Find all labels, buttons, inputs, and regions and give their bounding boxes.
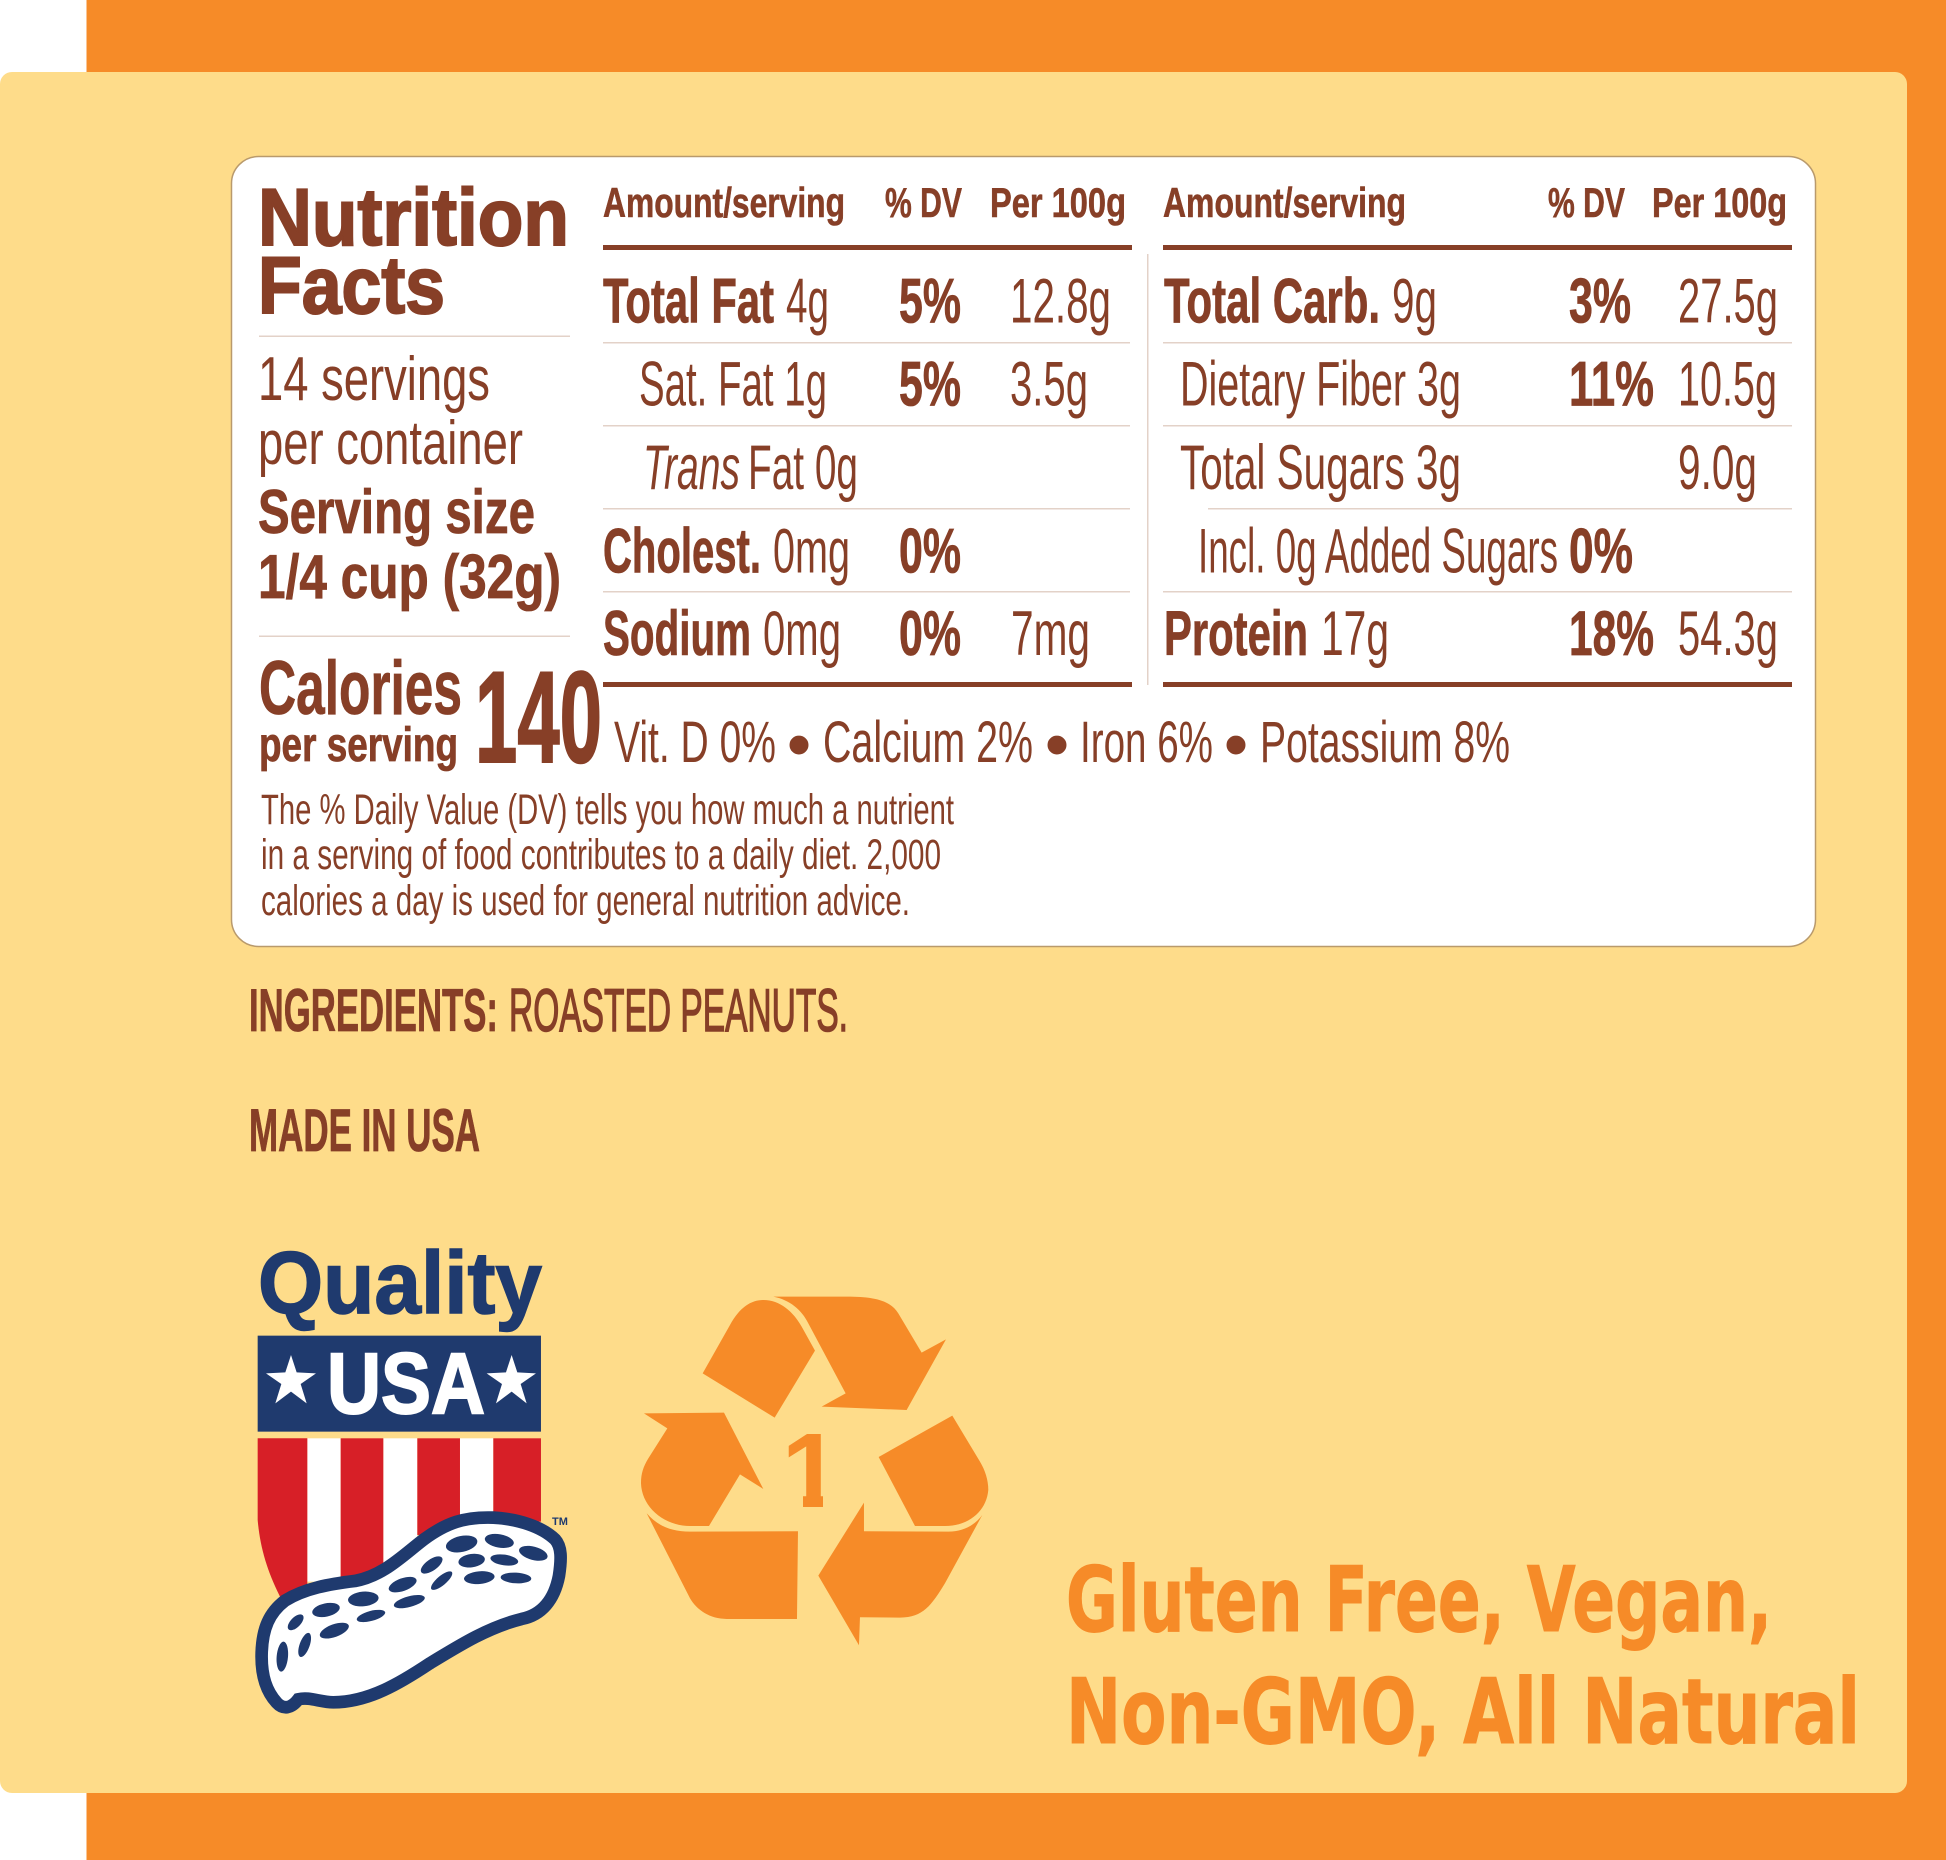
row: total carbohydrate: Total Carb.	[1164, 266, 1380, 336]
table header left: % DV	[885, 179, 962, 226]
row: cholesterol: Cholest.	[603, 516, 761, 586]
table: left nutrient column	[603, 179, 1132, 687]
row: sodium	[603, 599, 1090, 669]
table header right: Amount/serving	[1163, 179, 1406, 226]
row: total carbohydrate: 9g	[1392, 266, 1437, 336]
text block: vitamins and minerals: •	[787, 705, 811, 783]
panel: nutrition facts card	[232, 156, 1816, 946]
text block: ingredients: ROASTED PEANUTS.	[509, 977, 848, 1044]
row: sodium: Sodium	[603, 599, 751, 669]
table header right: % DV	[1548, 179, 1625, 226]
row: added sugars: Incl. 0g Added Sugars	[1198, 516, 1558, 586]
row: saturated fat	[639, 350, 1088, 420]
text block: calories per serving: per serving	[259, 719, 458, 772]
row: sodium: 0mg	[763, 599, 841, 669]
text block: servings and serving size: per container	[258, 409, 523, 478]
text block: servings and serving size: Serving size	[258, 478, 535, 547]
row: total sugars: Total Sugars 3g	[1180, 433, 1461, 503]
row: sodium: 7mg	[1011, 599, 1090, 669]
row: saturated fat: Sat. Fat 1g	[639, 350, 827, 420]
text block: daily value footnote: The % Daily Value (DV) tells you how much a nutrient	[261, 786, 954, 834]
callout: product claims	[1066, 1548, 1860, 1765]
row: trans fat: Trans	[643, 433, 740, 503]
row: sodium: 0%	[899, 599, 961, 669]
icon: recycling symbol number 1	[641, 1297, 988, 1645]
row: cholesterol: 0%	[899, 516, 961, 586]
text block: daily value footnote	[261, 786, 954, 925]
text block: vitamins and minerals: Potassium 8%	[1260, 710, 1510, 775]
text block: vitamins and minerals: Vit. D 0%	[614, 710, 776, 775]
row: saturated fat: 5%	[899, 350, 961, 420]
text block: servings and serving size: 1/4 cup (32g)	[258, 543, 561, 612]
text block: made in USA: MADE IN USA	[249, 1097, 480, 1164]
table header left: Amount/serving	[603, 179, 845, 226]
row: added sugars: 0%	[1569, 516, 1633, 586]
text block: vitamins and minerals	[614, 705, 1510, 783]
logo word: USA: USA	[327, 1336, 485, 1432]
row: total sugars: 9.0g	[1678, 433, 1757, 503]
row: protein: Protein	[1164, 599, 1308, 669]
logo word: Quality: Quality	[258, 1233, 542, 1332]
row: trans fat: Fat 0g	[748, 433, 858, 503]
icon: left star	[266, 1355, 316, 1403]
row: cholesterol: 0mg	[773, 516, 850, 586]
icon: right star	[487, 1355, 536, 1403]
text block: calories per serving: 140	[475, 644, 602, 790]
row: total fat	[603, 266, 1111, 336]
text block: vitamins and minerals: Calcium 2%	[823, 710, 1033, 775]
row: protein: 17g	[1321, 599, 1389, 669]
table header left	[603, 179, 1126, 226]
row: total carbohydrate	[1164, 266, 1778, 336]
row: dietary fiber: 10.5g	[1678, 350, 1777, 420]
text block: daily value footnote: calories a day is used for general nutrition advice.	[261, 877, 910, 925]
table header right: Per 100g	[1652, 179, 1787, 226]
heading: Nutrition Facts: Nutrition	[258, 173, 569, 263]
row: protein: 18%	[1569, 599, 1654, 669]
text block: vitamins and minerals: •	[1224, 705, 1248, 783]
row: dietary fiber: Dietary Fiber 3g	[1180, 350, 1461, 420]
row: total fat: 4g	[786, 266, 829, 336]
logo banner: blue bar	[258, 1336, 541, 1432]
icon: peanut	[262, 1518, 561, 1707]
row: total fat: 12.8g	[1010, 266, 1111, 336]
text block: daily value footnote: in a serving of food contributes to a daily diet. 2,000	[261, 831, 941, 879]
text block: servings and serving size	[258, 345, 561, 612]
table: right nutrient column	[1163, 179, 1792, 687]
heading: Nutrition Facts: Facts	[258, 241, 445, 331]
row: dietary fiber: 11%	[1569, 350, 1654, 420]
trademark mark: TM	[552, 1516, 568, 1528]
text block: servings and serving size: 14 servings	[258, 345, 490, 414]
text block: vitamins and minerals: •	[1045, 705, 1069, 783]
text block: vitamins and minerals: Iron 6%	[1080, 710, 1213, 775]
row: protein: 54.3g	[1678, 599, 1778, 669]
row: total carbohydrate: 27.5g	[1678, 266, 1778, 336]
row: cholesterol	[603, 516, 961, 586]
logo shield: stripes	[258, 1438, 541, 1597]
text block: calories per serving: Calories	[259, 646, 462, 731]
row: saturated fat: 3.5g	[1010, 350, 1088, 420]
table header right	[1163, 179, 1787, 226]
row: total fat: Total Fat	[603, 266, 774, 336]
recycling code number: 1	[782, 1412, 840, 1530]
row: total fat: 5%	[899, 266, 961, 336]
icon: Quality USA peanut shield logo	[258, 1233, 568, 1707]
table header left: Per 100g	[990, 179, 1126, 226]
text block: ingredients: INGREDIENTS:	[249, 977, 498, 1044]
row: total carbohydrate: 3%	[1569, 266, 1631, 336]
row: protein	[1164, 599, 1778, 669]
heading: Nutrition Facts	[258, 173, 569, 331]
text block: calories per serving	[259, 644, 602, 790]
